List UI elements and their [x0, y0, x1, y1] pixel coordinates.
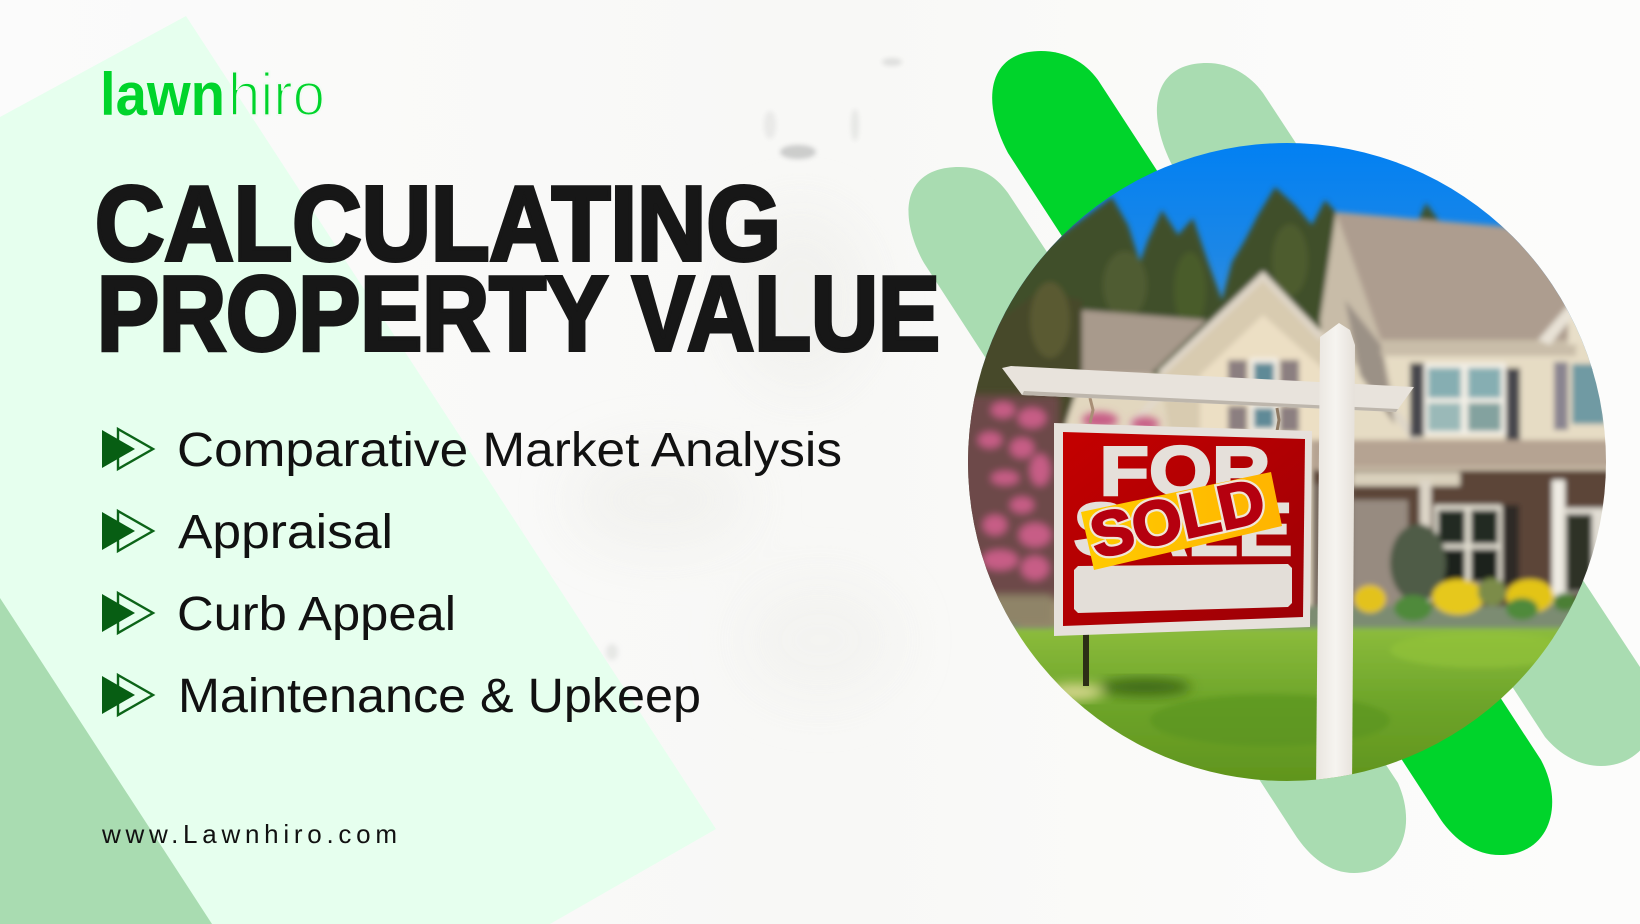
sold text: SOLD	[1084, 466, 1271, 572]
sign word SALE: SALE	[1074, 488, 1292, 571]
blank rider panel	[1074, 564, 1292, 613]
capsule: pale green lower	[909, 167, 1406, 873]
icon: double arrow	[102, 675, 153, 715]
main house wall	[1310, 340, 1605, 610]
porch columns	[1420, 480, 1431, 610]
right roof	[1333, 208, 1572, 343]
logo thin part: hiro	[228, 61, 325, 128]
list item: appraisal: Appraisal	[178, 506, 393, 559]
middle gable	[1164, 279, 1320, 428]
sold text outline: SOLD	[1084, 466, 1271, 572]
upper right windows	[1410, 363, 1424, 437]
middle window upper and lower	[1228, 360, 1247, 386]
title line 2: PROPERTY VALUE	[97, 255, 940, 373]
chain left	[1090, 398, 1093, 423]
title	[95, 165, 940, 373]
post	[1316, 323, 1355, 790]
title line 1: CALCULATING	[95, 165, 781, 283]
green shrubs	[1394, 595, 1432, 621]
sold banner	[1081, 466, 1282, 572]
icon: double arrow	[102, 593, 153, 633]
list item: curb appeal: Curb Appeal	[177, 588, 456, 641]
lawn highlight	[1394, 642, 1548, 668]
chain right	[1277, 408, 1279, 431]
pink flowering tree	[960, 395, 1159, 625]
icon: double arrow	[102, 429, 153, 469]
left roof	[1082, 310, 1207, 375]
list item: appraisal	[102, 506, 393, 559]
porch roof	[1310, 440, 1620, 470]
logo	[100, 61, 325, 128]
darker green corner triangle	[0, 598, 212, 924]
list item: maintenance and upkeep: Maintenance & Upkeep	[178, 670, 701, 723]
dark shrub	[1390, 524, 1446, 602]
stake	[1083, 634, 1089, 686]
blurred house and garden scene	[960, 187, 1620, 788]
for-sale sign board	[1054, 423, 1312, 636]
gable side	[1320, 212, 1392, 392]
logo bold part: lawn	[100, 61, 225, 128]
light green angled panel	[0, 16, 716, 924]
sign word FOR: FOR	[1100, 432, 1270, 510]
sky	[960, 140, 1620, 370]
brick lower storey	[1312, 466, 1606, 610]
yellow shrubs	[1354, 585, 1386, 613]
crossbar	[1002, 366, 1414, 412]
lawn	[1014, 625, 1560, 781]
flower bed strip	[1000, 606, 1620, 630]
capsule: pale green upper	[1157, 63, 1640, 766]
porch window	[1434, 505, 1502, 583]
list item: comparative market analysis: Comparative Market Analysis	[177, 424, 842, 477]
stake shadow on lawn	[1047, 678, 1191, 700]
website url: www.Lawnhiro.com	[101, 819, 397, 849]
icon: double arrow	[102, 511, 153, 551]
capsule: bright green	[992, 51, 1552, 855]
door	[1562, 508, 1610, 593]
right eave band	[1381, 340, 1576, 356]
photo: house with sold sign	[960, 140, 1620, 790]
